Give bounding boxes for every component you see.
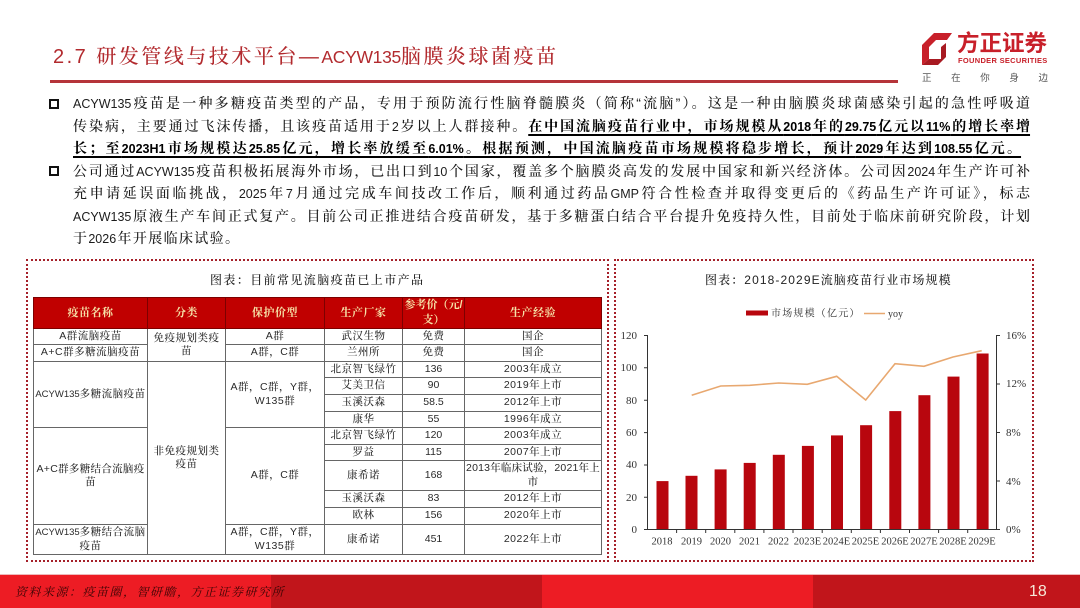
table: marketed vaccines: 艾美卫信 bbox=[342, 379, 386, 391]
table: marketed vaccines: 苗 bbox=[85, 476, 96, 488]
panel: vaccine table bbox=[26, 259, 609, 562]
bullet 2 line 4: 于2026年开展临床试验。 bbox=[73, 230, 239, 246]
category labels: 2029E bbox=[968, 536, 996, 548]
logo English name: FOUNDER SECURITIES bbox=[958, 56, 1048, 65]
table: marketed vaccines: 免费 bbox=[422, 346, 444, 358]
table: marketed vaccines: 免费 bbox=[422, 330, 444, 342]
right axis labels: 12% bbox=[1006, 378, 1026, 390]
title: 2.7 研发管线与技术平台—ACYW135脑膜炎球菌疫苗 bbox=[53, 46, 558, 68]
left axis labels bbox=[620, 330, 638, 536]
table: marketed vaccines: A群，C群，Y群， bbox=[230, 381, 320, 393]
table: marketed vaccines: 115 bbox=[425, 446, 442, 458]
category labels: 2020 bbox=[710, 536, 731, 548]
table: marketed vaccines: 2022年上市 bbox=[504, 533, 562, 545]
category labels: 2018 bbox=[652, 536, 672, 548]
right axis labels: 8% bbox=[1006, 427, 1021, 439]
table: marketed vaccines: A群，C群 bbox=[251, 469, 299, 481]
bullet 2 line 3: ACYW135原液生产车间正式复产。目前公司正推进结合疫苗研发，基于多糖蛋白结合平台提升免疫持久性，目前处于临床前研究阶段，计划 bbox=[73, 208, 1030, 224]
table: marketed vaccines: ACYW135多糖流脑疫苗 bbox=[35, 388, 146, 400]
table title: 图表：目前常见流脑疫苗已上市产品 bbox=[210, 273, 424, 287]
table: marketed vaccines: 罗益 bbox=[352, 446, 374, 458]
table: marketed vaccines: A群 bbox=[266, 330, 284, 342]
table: marketed vaccines: A群，C群 bbox=[251, 346, 299, 358]
table: marketed vaccines: 2003年成立 bbox=[504, 429, 562, 441]
table: marketed vaccines: 1996年成立 bbox=[504, 413, 562, 425]
table: marketed vaccines: 2012年上市 bbox=[504, 396, 562, 408]
left axis labels: 60 bbox=[626, 427, 638, 439]
table: marketed vaccines bbox=[33, 297, 602, 555]
bullet 1 line 3: 长；至2023H1市场规模达25.85亿元，增长率放缓至6.01%。根据预测，中国流脑疫苗市场规模将稳步增长，预计2029年达到108.55亿元。 bbox=[73, 140, 1021, 156]
category labels: 2025E bbox=[852, 536, 879, 548]
table: marketed vaccines: 生产经验 bbox=[510, 306, 556, 318]
table: marketed vaccines: 欧林 bbox=[352, 509, 374, 521]
logo: Founder Securities bbox=[922, 26, 1048, 84]
table: marketed vaccines: 武汉生物 bbox=[342, 330, 386, 342]
table: marketed vaccines: 2019年上市 bbox=[504, 379, 562, 391]
table: marketed vaccines: 康华 bbox=[352, 413, 374, 425]
table: marketed vaccines: 2020年上市 bbox=[504, 509, 562, 521]
table: marketed vaccines: 58.5 bbox=[423, 396, 444, 408]
category labels: 2019 bbox=[681, 536, 702, 548]
chart legend: 市场规模（亿元） bbox=[771, 306, 861, 320]
left axis labels: 120 bbox=[620, 330, 638, 342]
category labels: 2024E bbox=[823, 536, 850, 548]
line: yoy growth bbox=[692, 351, 982, 400]
table: marketed vaccines: 生产厂家 bbox=[340, 306, 386, 318]
table: marketed vaccines: 2013年临床试验，2021年上 bbox=[466, 462, 600, 474]
table: marketed vaccines: 北京智飞绿竹 bbox=[330, 429, 396, 441]
table: marketed vaccines: 2003年成立 bbox=[504, 363, 562, 375]
right axis labels: 4% bbox=[1006, 476, 1021, 488]
left axis labels: 80 bbox=[626, 395, 638, 407]
table: marketed vaccines: 90 bbox=[428, 379, 439, 391]
footer band bbox=[0, 574, 1080, 608]
left axis labels: 100 bbox=[620, 362, 638, 374]
logo wordmark: 方正证券 bbox=[957, 26, 1047, 58]
table: marketed vaccines: 玉溪沃森 bbox=[342, 492, 386, 504]
left axis labels: 20 bbox=[626, 492, 638, 504]
table: marketed vaccines: 康希诺 bbox=[347, 469, 380, 481]
left axis labels: 40 bbox=[626, 459, 638, 471]
table: marketed vaccines: 156 bbox=[425, 509, 442, 521]
table: marketed vaccines: W135群 bbox=[255, 540, 295, 552]
table: marketed vaccines: 136 bbox=[425, 363, 442, 375]
bullet 1 line 1: ACYW135疫苗是一种多糖疫苗类型的产品，专用于预防流行性脑脊髓膜炎（简称“流脑”）。这是一种由脑膜炎球菌感染引起的急性呼吸道 bbox=[73, 95, 1030, 111]
table: marketed vaccines: 120 bbox=[425, 429, 442, 441]
icon: logo mark bbox=[922, 33, 952, 65]
chart title: 图表：2018-2029E流脑疫苗行业市场规模 bbox=[705, 273, 952, 287]
bullet text block 2 marker bbox=[49, 166, 59, 176]
table: marketed vaccines: A群，C群，Y群， bbox=[230, 526, 320, 538]
table: marketed vaccines: 参考价（元/ bbox=[404, 299, 463, 311]
table: marketed vaccines: 分类 bbox=[175, 306, 198, 318]
right axis labels bbox=[1006, 330, 1026, 536]
right axis labels: 0% bbox=[1006, 524, 1021, 536]
panel: market size chart bbox=[614, 259, 1034, 562]
table: marketed vaccines: 83 bbox=[428, 492, 439, 504]
bullet 2 line 1: 公司通过ACYW135疫苗积极拓展海外市场，已出口到10个国家，覆盖多个脑膜炎高发的发展中国家和新兴经济体。公司因2024年生产许可补 bbox=[73, 163, 1030, 179]
table: marketed vaccines: 市 bbox=[528, 476, 538, 488]
category labels: 2026E bbox=[881, 536, 909, 548]
category labels: 2028E bbox=[939, 536, 967, 548]
table: marketed vaccines: 康希诺 bbox=[347, 533, 380, 545]
table: marketed vaccines: 非免疫规划类疫苗 bbox=[154, 444, 220, 470]
right axis labels: 16% bbox=[1006, 330, 1026, 342]
table: marketed vaccines: 北京智飞绿竹 bbox=[330, 363, 396, 375]
table: marketed vaccines: A+C群多糖流脑疫苗 bbox=[41, 346, 140, 358]
table: marketed vaccines: 2012年上市 bbox=[504, 492, 562, 504]
bullet 1 line 2: 传染病，主要通过飞沫传播，且该疫苗适用于2岁以上人群接种。在中国流脑疫苗行业中，市场规模从2018年的29.75亿元以11%的增长率增 bbox=[73, 118, 1030, 134]
table: marketed vaccines: 玉溪沃森 bbox=[342, 396, 386, 408]
table: marketed vaccines: 支） bbox=[422, 314, 444, 326]
table: marketed vaccines: W135群 bbox=[255, 394, 295, 406]
left axis labels: 0 bbox=[632, 524, 638, 536]
page number: 18 bbox=[1029, 583, 1047, 600]
bullet text block 1 marker bbox=[49, 99, 59, 109]
bars: market size bbox=[656, 354, 989, 529]
table: marketed vaccines: A群流脑疫苗 bbox=[59, 330, 122, 342]
table: marketed vaccines: 2007年上市 bbox=[504, 446, 562, 458]
category labels: 2027E bbox=[910, 536, 938, 548]
category labels: 2023E bbox=[794, 536, 821, 548]
table: marketed vaccines: 55 bbox=[428, 413, 439, 425]
table: marketed vaccines: 国企 bbox=[522, 346, 544, 358]
table: marketed vaccines: 国企 bbox=[522, 330, 544, 342]
chart legend: yoy bbox=[888, 309, 903, 320]
table: marketed vaccines: 168 bbox=[425, 469, 442, 481]
source note: 资料来源：疫苗圈，智研瞻，方正证券研究所 bbox=[15, 585, 285, 599]
category labels bbox=[652, 536, 996, 548]
logo slogan: 正 在 你 身 边 bbox=[922, 70, 1048, 84]
table: marketed vaccines: ACYW135多糖结合流脑疫苗 bbox=[35, 526, 146, 552]
table: marketed vaccines: 保护价型 bbox=[252, 306, 298, 318]
table: marketed vaccines: 疫苗名称 bbox=[68, 306, 114, 318]
chart legend bbox=[746, 306, 903, 320]
table: marketed vaccines: 451 bbox=[425, 533, 442, 545]
table: marketed vaccines: 免疫规划类疫苗 bbox=[154, 332, 220, 357]
table: marketed vaccines: A+C群多糖结合流脑疫 bbox=[36, 462, 145, 474]
table: marketed vaccines: 兰州所 bbox=[347, 346, 380, 358]
category labels: 2021 bbox=[739, 536, 760, 548]
axes bbox=[644, 335, 1000, 533]
category labels: 2022 bbox=[768, 536, 789, 548]
bullet 2 line 2: 充申请延误面临挑战，2025年7月通过完成车间技改工作后，顺利通过药品GMP符合性检查并取得变更后的《药品生产许可证》，标志 bbox=[73, 185, 1030, 201]
